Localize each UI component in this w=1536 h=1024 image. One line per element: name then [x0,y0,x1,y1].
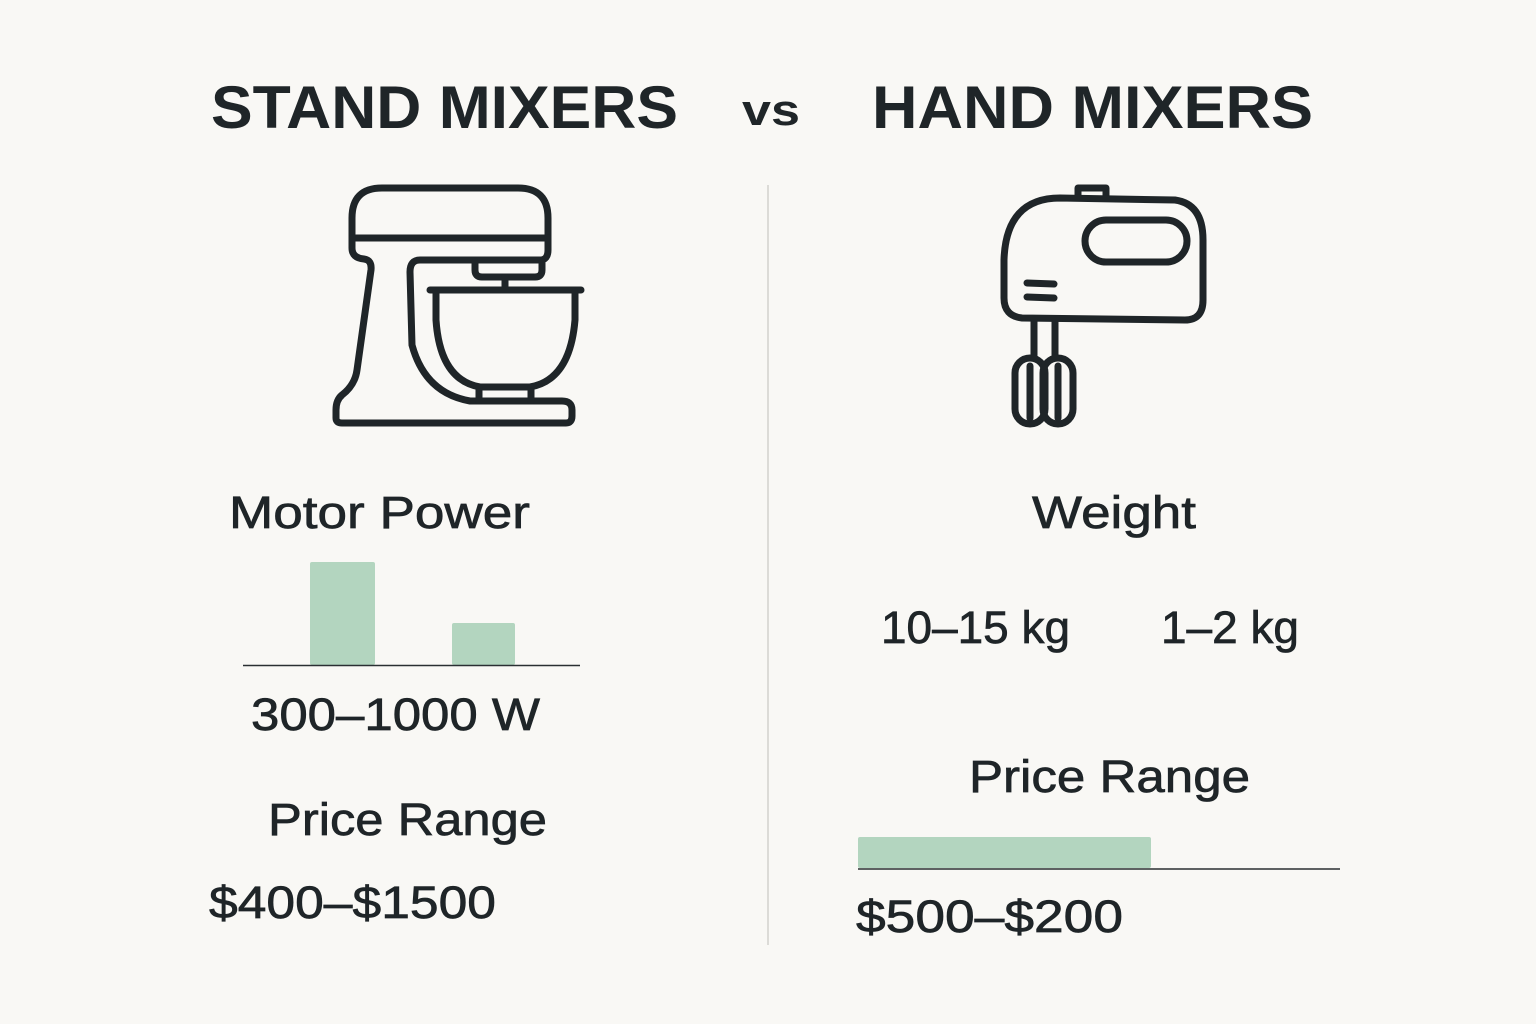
icon: hand mixer [1004,188,1203,424]
heading: hand price range: Price Range [969,751,1250,802]
title: STAND MIXERS [211,74,678,141]
title: HAND MIXERS [872,74,1313,141]
text: weight values [881,602,1299,653]
heading: stand price range: Price Range [268,794,547,845]
text: hand price value: $500–$200 [856,891,1123,942]
title [211,74,1313,141]
icon: stand mixer [336,188,581,423]
bar chart: motor power [243,562,580,666]
heading: motor power: Motor Power [229,487,530,538]
text: weight values: 10–15 kg [881,602,1070,653]
text: weight values: 1–2 kg [1161,602,1299,653]
title: vs [742,86,800,135]
text: stand price value: $400–$1500 [209,877,496,928]
text: motor power value: 300–1000 W [251,689,541,740]
bar chart: hand price [858,837,1340,869]
heading: weight: Weight [1032,487,1197,538]
